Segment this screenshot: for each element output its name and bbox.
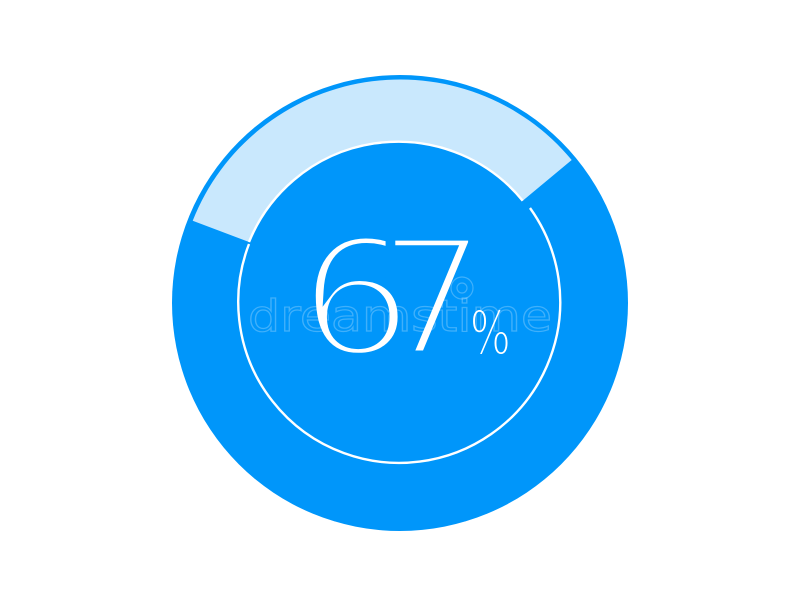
watermark bbox=[248, 277, 552, 342]
white progress ring bbox=[238, 142, 560, 463]
watermark: dreamstime bbox=[248, 291, 552, 342]
outer blue disc bbox=[172, 75, 628, 531]
percent sign: % bbox=[470, 298, 511, 369]
light remaining 33% band bbox=[193, 79, 572, 242]
value: 67 bbox=[298, 203, 488, 394]
value: 67: 6 bbox=[298, 203, 414, 394]
value: 67: 7 bbox=[376, 205, 488, 394]
